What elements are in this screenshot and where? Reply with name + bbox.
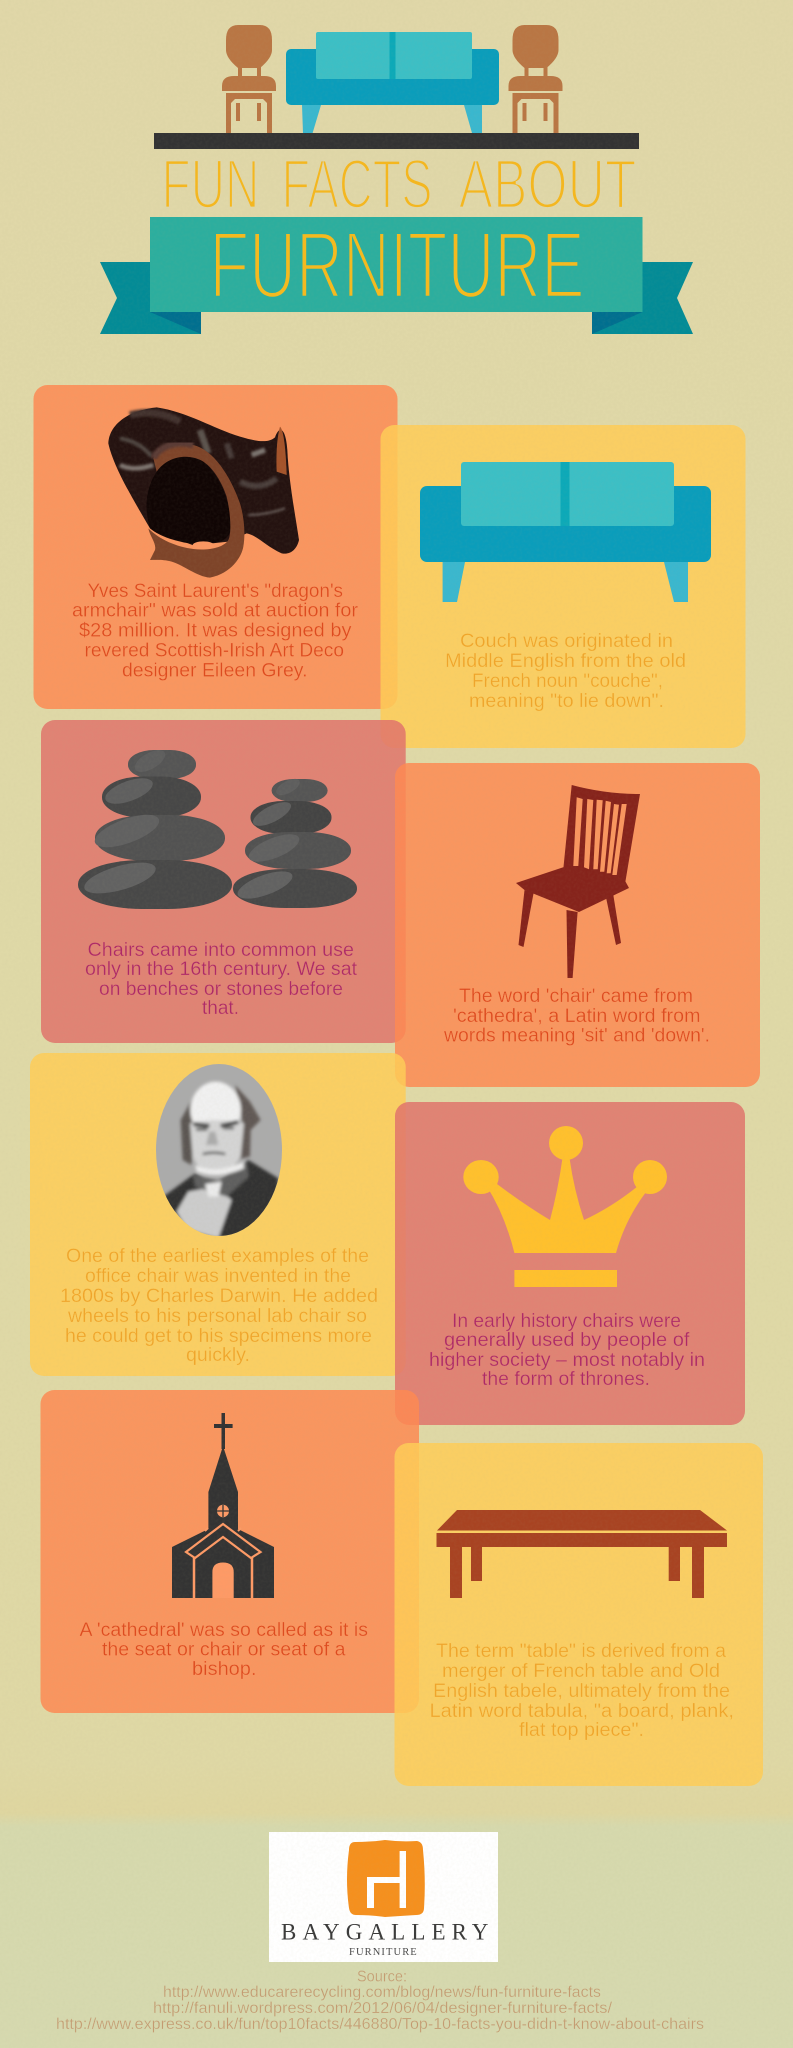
icon: couch xyxy=(420,462,711,602)
image: portrait of charles darwin xyxy=(156,1064,282,1236)
text: thrones fact: higher society – most notably in xyxy=(429,1350,705,1371)
icon: left stone stack xyxy=(78,746,232,909)
logo chair glyph xyxy=(367,1851,406,1908)
source list: http://fanuli.wordpress.com/2012/06/04/designer-furniture-facts/ xyxy=(153,2000,613,2017)
panel background xyxy=(394,1443,763,1786)
text: darwin fact: One of the earliest examples of the xyxy=(66,1246,369,1267)
seat opening xyxy=(147,457,231,544)
gap under seat xyxy=(193,541,214,549)
ribbon left fold xyxy=(150,312,201,334)
text: dragon's armchair fact: $28 million. It was designed by xyxy=(79,620,352,642)
text: darwin fact: wheels to his personal lab chair so xyxy=(67,1306,367,1327)
text: thrones fact: In early history chairs were xyxy=(452,1311,681,1332)
panel: dragon's armchair xyxy=(34,385,398,709)
text: couch fact xyxy=(445,631,686,712)
text: cathedral fact: the seat or chair or seat of a xyxy=(102,1640,346,1660)
wooden ring frame xyxy=(148,443,244,578)
text: table fact xyxy=(430,1641,734,1741)
logo subtitle: FURNITURE xyxy=(349,1947,418,1958)
text: couch fact: Middle English from the old xyxy=(445,651,686,672)
text: chair etymology fact xyxy=(443,986,710,1046)
title: fun facts about xyxy=(162,145,636,223)
icon: church xyxy=(172,1413,274,1598)
panel: stones xyxy=(41,720,406,1043)
logo background xyxy=(269,1832,498,1962)
header illustration: sofa and chairs on shelf xyxy=(154,25,639,149)
text: cathedral fact: A 'cathedral' was so called as it is xyxy=(80,1620,368,1641)
panel background xyxy=(34,385,398,709)
text: table fact: flat top piece". xyxy=(519,1720,644,1741)
text: thrones fact: the form of thrones. xyxy=(482,1369,650,1390)
text: dragon's armchair fact: armchair" was sold at auction for xyxy=(72,600,359,622)
panel background xyxy=(40,1390,419,1713)
icon: right chair xyxy=(508,25,562,133)
collar xyxy=(195,1162,244,1175)
text: couch fact: French noun "couche", xyxy=(472,671,663,692)
banner xyxy=(150,217,642,312)
text: stones fact: on benches or stones before xyxy=(99,979,343,1000)
text: darwin fact: quickly. xyxy=(186,1345,250,1366)
icon: crown xyxy=(463,1126,667,1287)
panel background xyxy=(395,763,760,1087)
text: darwin fact: 1800s by Charles Darwin. He added xyxy=(60,1286,378,1307)
logo: baygallery furniture xyxy=(269,1832,498,1962)
ring shading xyxy=(153,443,193,458)
text: dragon's armchair fact: designer Eileen Grey. xyxy=(122,660,308,682)
cravat xyxy=(193,1162,249,1197)
text: cathedral fact xyxy=(80,1620,368,1680)
panel: chair etymology xyxy=(395,763,760,1087)
brows and eyes xyxy=(193,1122,238,1126)
text: dragon's armchair fact xyxy=(72,581,359,682)
ribbon right tail xyxy=(592,262,693,334)
title: fun facts about: ABOUT xyxy=(458,145,636,223)
hair xyxy=(181,1100,195,1165)
nose xyxy=(206,1132,218,1145)
text: thrones fact: generally used by people of xyxy=(444,1330,690,1351)
text: table fact: merger of French table and Old xyxy=(442,1661,720,1682)
text: stones fact: that. xyxy=(202,998,239,1019)
icon: left chair xyxy=(222,25,276,133)
text: stones fact: only in the 16th century. We sat xyxy=(85,959,358,980)
source list: Source: xyxy=(357,1968,407,1986)
panel: crown xyxy=(395,1102,745,1425)
text: darwin fact: office chair was invented in the xyxy=(85,1266,351,1287)
panel background xyxy=(30,1053,406,1376)
text: chair etymology fact: 'cathedra', a Latin word from xyxy=(453,1006,700,1027)
right wing of the frame xyxy=(276,427,287,475)
coat xyxy=(163,1160,278,1240)
shelf xyxy=(154,133,639,149)
ribbon right fold xyxy=(592,312,642,334)
panel: cathedral xyxy=(40,1390,419,1713)
mouth xyxy=(203,1153,225,1154)
shirt xyxy=(177,1187,232,1238)
text: darwin fact: he could get to his specimens more xyxy=(65,1326,372,1347)
icon: sofa xyxy=(286,32,499,133)
text: chair etymology fact: words meaning 'sit' and 'down'. xyxy=(443,1026,710,1046)
title: furniture: FURNITURE xyxy=(210,212,584,318)
source list xyxy=(56,1968,704,2033)
text: table fact: The term "table" is derived from a xyxy=(436,1641,726,1662)
source list: http://www.express.co.uk/fun/top10facts/446880/Top-10-facts-you-didn-t-know-about-chairs xyxy=(56,2016,704,2033)
logo wordmark: BAYGALLERY xyxy=(281,1920,494,1944)
icon: dining chair xyxy=(516,785,640,978)
leather highlights xyxy=(120,413,285,515)
text: table fact: English tabele, ultimately from the xyxy=(433,1681,730,1702)
panel background xyxy=(395,1102,745,1425)
text: darwin fact xyxy=(60,1246,378,1366)
text: couch fact: meaning "to lie down". xyxy=(469,691,664,712)
panel: table xyxy=(394,1443,763,1786)
title: fun facts about: FACTS xyxy=(282,145,432,223)
panel: charles darwin xyxy=(30,1053,406,1376)
panel background xyxy=(380,425,746,748)
text: table fact: Latin word tabula, "a board, plank, xyxy=(430,1701,734,1722)
forehead xyxy=(188,1080,244,1124)
armchair leather body xyxy=(108,407,299,554)
text: stones fact: Chairs came into common use xyxy=(88,940,354,961)
icon: right stone stack xyxy=(233,776,357,908)
text: dragon's armchair fact: revered Scottish-Irish Art Deco xyxy=(84,640,344,662)
text: cathedral fact: bishop. xyxy=(192,1659,256,1680)
text: dragon's armchair fact: Yves Saint Laurent's "dragon's xyxy=(88,581,343,602)
ribbon left tail xyxy=(100,262,201,334)
title: fun facts about: FUN xyxy=(162,145,260,223)
text: couch fact: Couch was originated in xyxy=(460,631,673,652)
image: dragon's armchair xyxy=(108,407,299,578)
panel: couch xyxy=(380,425,746,748)
icon: table xyxy=(436,1510,727,1598)
text: thrones fact xyxy=(429,1311,705,1390)
text: stones fact xyxy=(85,940,358,1019)
face xyxy=(190,1120,244,1175)
source list: http://www.educarerecycling.com/blog/news/fun-furniture-facts xyxy=(163,1984,601,2001)
logo mark xyxy=(347,1840,425,1917)
ribbon banner with furniture title xyxy=(100,212,693,334)
text: chair etymology fact: The word 'chair' came from xyxy=(459,986,693,1007)
panel background xyxy=(41,720,406,1043)
